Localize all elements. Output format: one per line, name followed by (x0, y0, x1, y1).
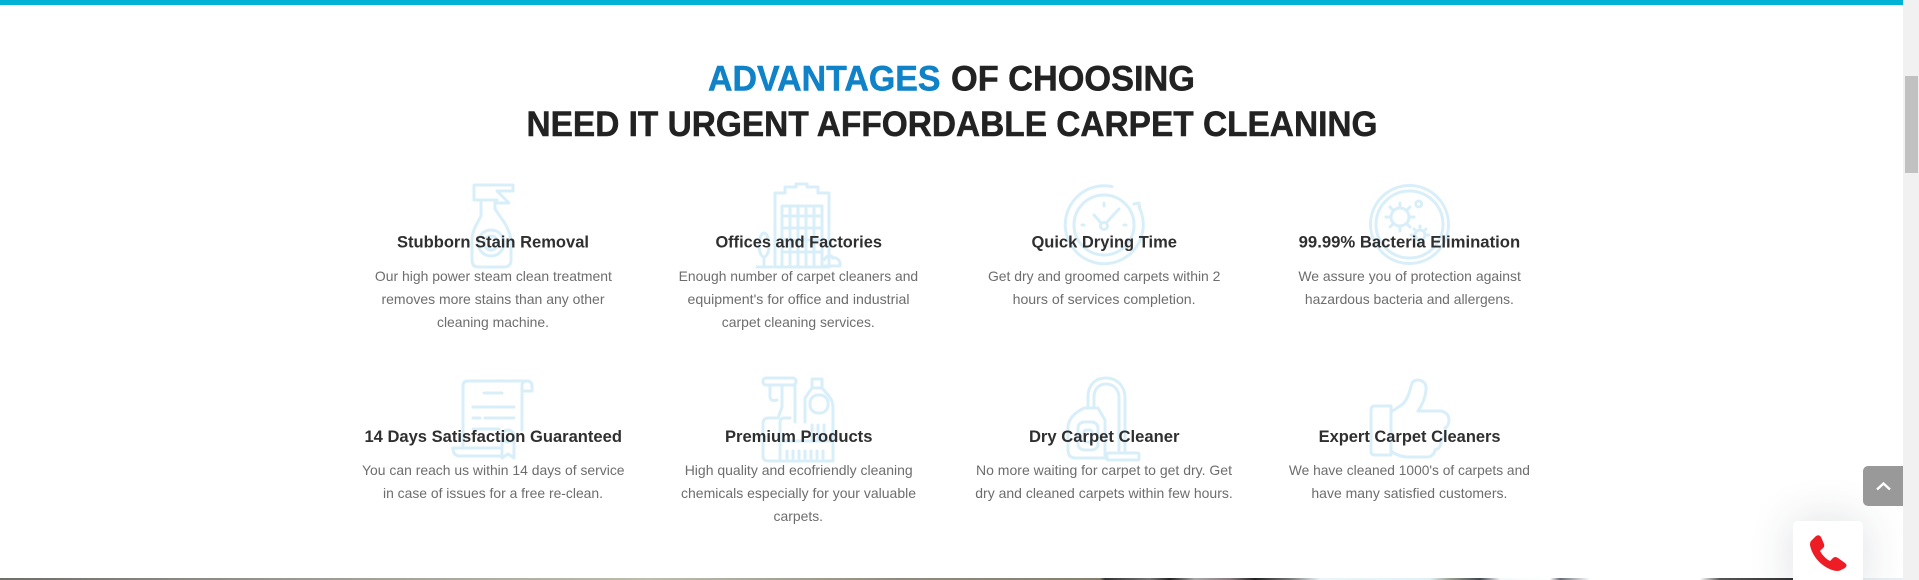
icon: chevron up (1876, 482, 1891, 490)
text block: High quality and ecofriendly cleaning (685, 462, 913, 478)
text block: We assure you of protection against (1298, 268, 1521, 284)
top accent bar (0, 0, 1903, 5)
text block: in case of issues for a free re-clean. (383, 485, 603, 501)
heading: Offices and Factories (715, 232, 882, 252)
text block (362, 462, 625, 501)
title: OF CHOOSING (951, 60, 1195, 98)
text block: dry and cleaned carpets within few hours. (975, 485, 1233, 501)
panel: dry carpet cleaner (975, 378, 1233, 501)
panel: satisfaction guaranteed (362, 381, 625, 501)
icon: certificate scroll (453, 381, 532, 458)
text block: hours of services completion. (1013, 291, 1196, 307)
icon: red phone (1810, 535, 1846, 571)
heading: Quick Drying Time (1031, 232, 1177, 252)
text block: have many satisfied customers. (1311, 485, 1507, 501)
text block (1298, 268, 1521, 307)
icon: cleaning products (763, 378, 833, 461)
text block: carpets. (774, 508, 823, 524)
panel: premium products (681, 378, 916, 524)
panel: expert carpet cleaners (1289, 380, 1530, 501)
text block (975, 462, 1233, 501)
text block: carpet cleaning services. (722, 314, 875, 330)
text block (1289, 462, 1530, 501)
title: ADVANTAGES (708, 60, 940, 98)
icon: clock with arrow (1065, 186, 1143, 264)
panel: quick drying time (988, 186, 1221, 307)
text block: equipment's for office and industrial (688, 291, 910, 307)
scrollbar thumb (1905, 76, 1918, 173)
text block (679, 268, 918, 330)
title: NEED IT URGENT AFFORDABLE CARPET CLEANING (526, 105, 1378, 144)
scrollbar (1903, 0, 1919, 580)
bottom photo strip (0, 578, 1903, 580)
heading: Dry Carpet Cleaner (1029, 427, 1180, 446)
text block (375, 268, 612, 330)
text block: Get dry and groomed carpets within 2 (988, 268, 1221, 284)
heading: 99.99% Bacteria Elimination (1299, 232, 1520, 252)
panel: offices and factories (679, 184, 918, 330)
call button (1793, 521, 1863, 580)
heading: Stubborn Stain Removal (397, 232, 589, 252)
text block: No more waiting for carpet to get dry. Get (976, 462, 1232, 478)
icon: thumbs up (1371, 380, 1449, 457)
icon: office building (757, 184, 840, 267)
icon: vacuum cleaner (1068, 378, 1139, 460)
text block: Our high power steam clean treatment (375, 268, 612, 284)
heading: Expert Carpet Cleaners (1319, 427, 1501, 446)
panel: stubborn stain removal (375, 185, 612, 330)
text block: chemicals especially for your valuable (681, 485, 916, 501)
panel: bacteria elimination (1298, 186, 1521, 307)
title (526, 60, 1378, 144)
text block: Enough number of carpet cleaners and (679, 268, 918, 284)
text block (681, 462, 916, 524)
heading: 14 Days Satisfaction Guaranteed (364, 427, 622, 446)
icon: spray bottle (472, 185, 513, 267)
heading: Premium Products (725, 427, 872, 446)
icon: petri dish with bacteria (1370, 186, 1448, 264)
text block (988, 268, 1221, 307)
text block: hazardous bacteria and allergens. (1305, 291, 1514, 307)
back to top button (1863, 466, 1903, 506)
text block: You can reach us within 14 days of service (362, 462, 625, 478)
text block: removes more stains than any other (382, 291, 605, 307)
text block: cleaning machine. (437, 314, 549, 330)
text block: We have cleaned 1000's of carpets and (1289, 462, 1530, 478)
